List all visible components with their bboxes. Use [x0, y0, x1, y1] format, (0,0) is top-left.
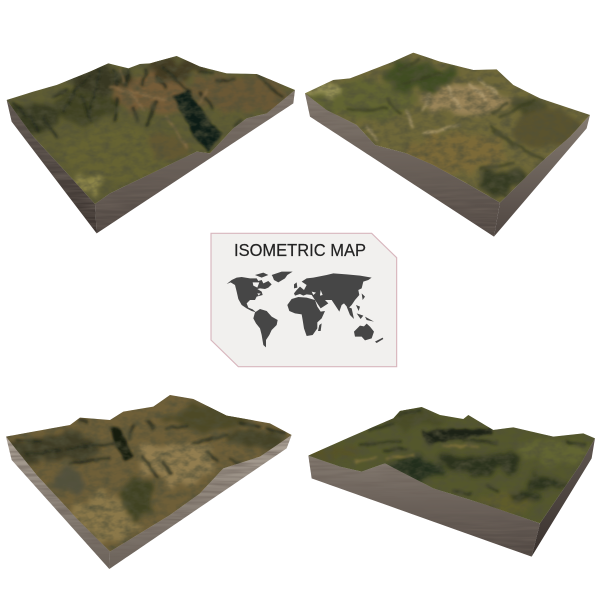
block sides — [3, 433, 293, 572]
terrain block: top right — [300, 50, 600, 238]
Australia — [354, 324, 374, 340]
Eurasia — [294, 273, 372, 312]
British Isles — [294, 282, 297, 288]
block sides — [303, 90, 590, 238]
terrain block: bottom left — [6, 395, 292, 569]
world map — [227, 272, 383, 347]
Arctic islands — [255, 273, 268, 278]
Southeast Asia and islands — [347, 293, 374, 322]
title: ISOMETRIC MAP — [234, 240, 366, 260]
South America — [253, 309, 278, 347]
terrain surface — [305, 52, 590, 202]
card background — [211, 233, 397, 367]
map card — [211, 233, 397, 367]
terrain block: bottom right — [308, 407, 595, 557]
Madagascar — [318, 323, 322, 331]
North America — [227, 277, 272, 312]
block sides — [307, 438, 595, 558]
terrain surface — [308, 407, 595, 524]
terrain block: top left — [0, 50, 300, 237]
terrain surface — [6, 395, 292, 552]
terrain surface — [6, 56, 295, 204]
block sides — [0, 90, 297, 237]
Hudson Bay and inland seas — [253, 282, 323, 296]
Greenland — [272, 272, 293, 282]
Africa — [287, 297, 325, 336]
New Zealand — [375, 338, 383, 343]
